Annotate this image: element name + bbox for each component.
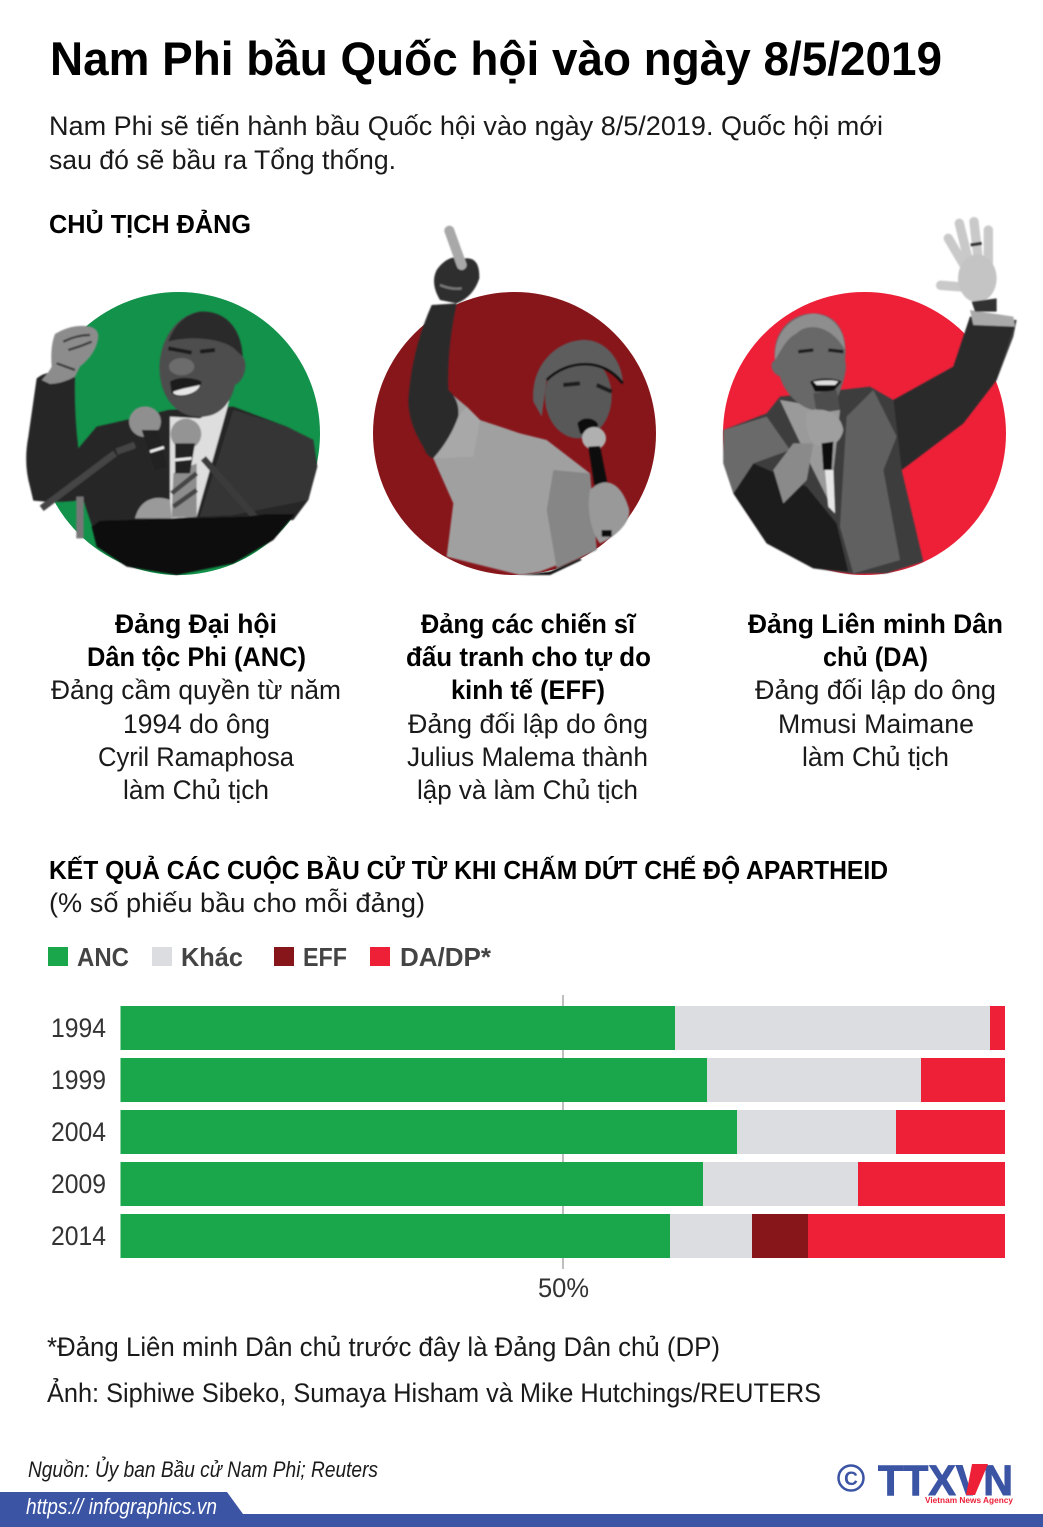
caption: EFF: Đảng đối lập do ông [408, 709, 648, 739]
footer band: https:// infographics.vn [26, 1494, 217, 1519]
portrait: ANC Cyril Ramaphosa on green circle [26, 292, 320, 575]
bar: 1999 [51, 1058, 1005, 1102]
legend: EFF [303, 942, 347, 972]
bar: 2009: 2009 [51, 1169, 106, 1199]
chart heading: (% số phiếu bầu cho mỗi đảng) [49, 887, 425, 918]
axis label: 50%: 50% [538, 1273, 589, 1303]
intro text [49, 111, 883, 175]
footnote: *Đảng Liên minh Dân chủ trước đây là Đảng Dân chủ (DP) [47, 1332, 720, 1362]
bar: 1994: 1994 [51, 1013, 106, 1043]
legend [48, 942, 492, 972]
bar: 2009 [51, 1162, 1005, 1206]
caption: ANC: Dân tộc Phi (ANC) [87, 642, 306, 672]
caption: DA: Mmusi Maimane [778, 709, 974, 739]
caption: ANC: Cyril Ramaphosa [98, 742, 295, 772]
bar: 1994 [51, 1006, 1005, 1050]
caption: ANC [51, 609, 341, 805]
caption: ANC: Đảng Đại hội [115, 609, 277, 639]
caption: DA [748, 609, 1003, 772]
caption: DA: Đảng Liên minh Dân [748, 609, 1003, 639]
legend: DA/DP* [400, 942, 492, 972]
caption: ANC: Đảng cầm quyền từ năm [51, 675, 341, 705]
bar: 2014 [51, 1214, 1005, 1258]
bar: 2004 [51, 1110, 1005, 1154]
source: Nguồn: Ủy ban Bầu cử Nam Phi; Reuters [28, 1456, 378, 1482]
caption: EFF [406, 609, 651, 805]
caption: DA: chủ (DA) [823, 642, 928, 672]
photo credit: Ảnh: Siphiwe Sibeko, Sumaya Hisham và Mike Hutchings/REUTERS [47, 1376, 821, 1408]
title: Nam Phi bầu Quốc hội vào ngày 8/5/2019 [50, 32, 942, 85]
heading: party chairs: CHỦ TỊCH ĐẢNG [49, 208, 251, 239]
chart heading [49, 854, 888, 918]
caption: EFF: Julius Malema thành [407, 742, 648, 772]
logo: TTXVN: C [844, 1469, 858, 1490]
bar: 2004: 2004 [51, 1117, 106, 1147]
intro text: Nam Phi sẽ tiến hành bầu Quốc hội vào ngày 8/5/2019. Quốc hội mới [49, 111, 883, 141]
caption: EFF: đấu tranh cho tự do [406, 642, 651, 672]
bar: 1999: 1999 [51, 1065, 106, 1095]
caption: EFF: kinh tế (EFF) [451, 675, 605, 705]
portrait: EFF Julius Malema on dark red circle [373, 231, 656, 575]
chart heading: KẾT QUẢ CÁC CUỘC BẦU CỬ TỪ KHI CHẤM DỨT CHẾ ĐỘ APARTHEID [49, 854, 888, 885]
legend: ANC [77, 942, 129, 972]
logo: TTXVN: TTXVN [878, 1457, 1013, 1505]
caption: DA: làm Chủ tịch [802, 742, 949, 772]
footer band [0, 1492, 1043, 1527]
stacked bar chart [51, 995, 1005, 1303]
logo: TTXVN: Vietnam News Agency [925, 1495, 1013, 1505]
intro text: sau đó sẽ bầu ra Tổng thống. [49, 145, 396, 175]
portrait: DA Mmusi Maimane on red circle [723, 222, 1017, 575]
caption: DA: Đảng đối lập do ông [755, 675, 996, 705]
legend: Khác [181, 942, 243, 972]
caption: ANC: 1994 do ông [123, 709, 270, 739]
caption: EFF: Đảng các chiến sĩ [421, 609, 636, 639]
caption: ANC: làm Chủ tịch [123, 775, 269, 805]
caption: EFF: lập và làm Chủ tịch [417, 775, 638, 805]
bar: 2014: 2014 [51, 1221, 106, 1251]
